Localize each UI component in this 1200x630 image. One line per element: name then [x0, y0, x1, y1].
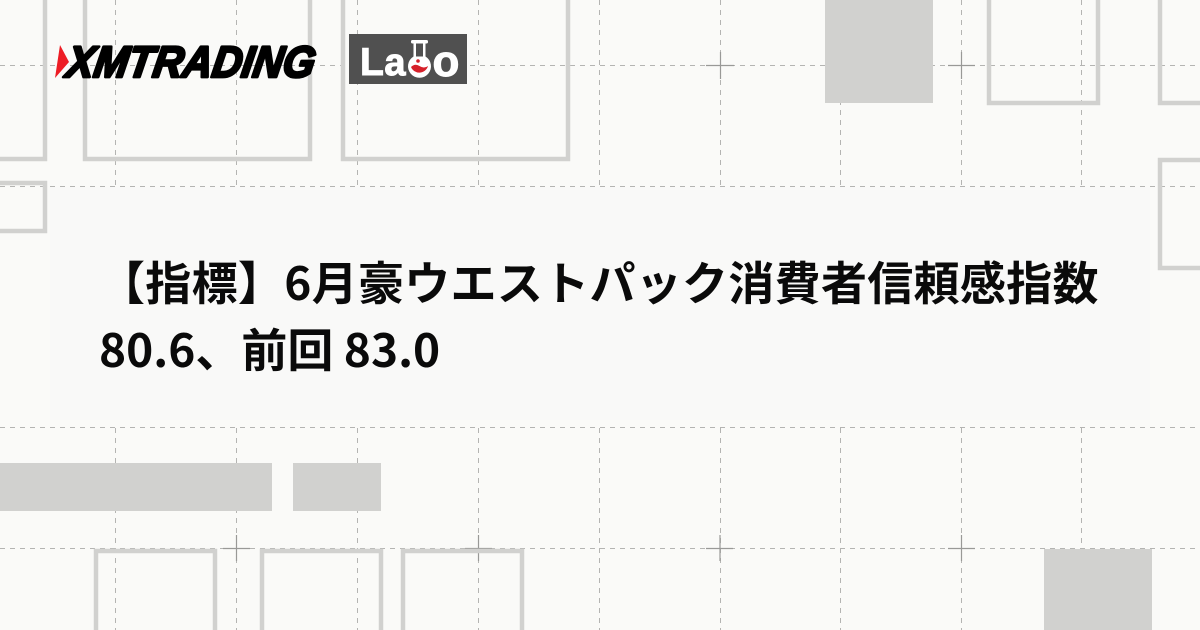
logo: Lab badge: a: [384, 42, 406, 84]
logo: XMTRADING: XMTRADING: [61, 38, 319, 87]
title: 80.6、前回 83.0: [99, 315, 440, 381]
title: 【指標】6月豪ウエストパック消費者信頼感指数: [99, 248, 1099, 314]
title: [99, 248, 1099, 381]
logo: Lab badge: [349, 34, 467, 86]
letter: o: o: [433, 37, 459, 86]
icon: flask: [408, 40, 431, 78]
icon: XM red arrow: [55, 45, 69, 78]
logos: [55, 34, 467, 87]
panel: title background: [50, 187, 1150, 420]
logo: Lab badge: L: [360, 41, 384, 84]
